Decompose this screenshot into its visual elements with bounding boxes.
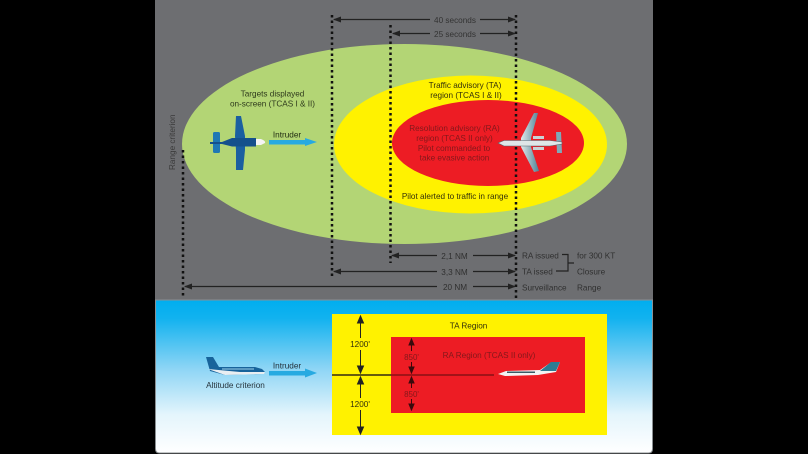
label: RA region: RA Region (TCAS II only)	[443, 351, 536, 360]
label: range criterion: Range criterion	[168, 114, 177, 170]
label: traffic advisory region: Traffic advisory (TA)	[429, 81, 502, 90]
altitude centre line	[332, 374, 391, 376]
distance labels: 3,3 NM	[441, 268, 468, 277]
distance labels: 20 NM	[443, 283, 467, 292]
yellow ellipse: TA region	[334, 76, 607, 214]
green ellipse: surveillance range	[182, 44, 627, 244]
distance labels: Closure	[577, 268, 606, 276]
distance labels: Surveillance	[522, 284, 567, 292]
label: resolution advisory region: Pilot commanded to	[418, 144, 491, 153]
label: targets displayed: Targets displayed	[241, 90, 305, 98]
label: targets displayed: on-screen (TCAS I & II)	[230, 100, 315, 108]
label: 1200 ft lower: 1200'	[350, 400, 370, 409]
arrow: intruder bottom: Intruder	[273, 362, 301, 370]
arrows: 1200 ft	[358, 316, 364, 434]
label: resolution advisory region: take evasive action	[420, 154, 490, 162]
label: 25 seconds: 25 seconds	[434, 30, 476, 39]
TA region rectangle	[332, 314, 607, 435]
arrow: intruder top: Intruder	[273, 130, 301, 140]
icon: own aircraft side view	[498, 362, 560, 376]
label: 850 ft lower: 850'	[404, 390, 419, 399]
arrow: intruder bottom	[269, 362, 317, 378]
red ellipse: RA region	[392, 100, 584, 186]
arrow: intruder top	[269, 130, 317, 146]
label: TA region: TA Region	[450, 322, 488, 330]
icon: intruder plane top view	[210, 116, 265, 170]
label: traffic advisory region: region (TCAS I & II)	[430, 91, 502, 100]
label: altitude criterion: Altitude criterion	[206, 381, 265, 390]
distance labels: RA issued	[522, 252, 559, 260]
arrows: 850 ft	[409, 339, 414, 410]
time arrows: 40 seconds and 25 seconds	[334, 20, 515, 34]
panel: altitude criterion (side view)	[156, 300, 652, 453]
closure bracket	[556, 254, 574, 271]
icon: intruder plane side view	[206, 357, 265, 375]
distance labels: 2,1 NM	[441, 252, 468, 261]
distance labels: Range	[577, 284, 602, 292]
distance arrows	[185, 256, 515, 286]
panel: range criterion (top view)	[155, 0, 653, 300]
label: 40 seconds: 40 seconds	[434, 16, 476, 25]
label: resolution advisory region: region (TCAS II only)	[416, 134, 493, 143]
distance labels	[441, 252, 615, 292]
icon: own aircraft top view	[498, 113, 562, 172]
distance labels: for 300 KT	[577, 252, 615, 260]
distance labels: TA issed	[522, 268, 553, 276]
label: 1200 ft upper: 1200'	[350, 340, 370, 349]
RA region rectangle	[391, 337, 585, 413]
label: 850 ft upper: 850'	[404, 353, 419, 362]
label: resolution advisory region: Resolution advisory (RA)	[409, 124, 500, 133]
label: pilot alerted: Pilot alerted to traffic in range	[402, 192, 509, 201]
dotted vertical guide lines	[183, 15, 516, 298]
